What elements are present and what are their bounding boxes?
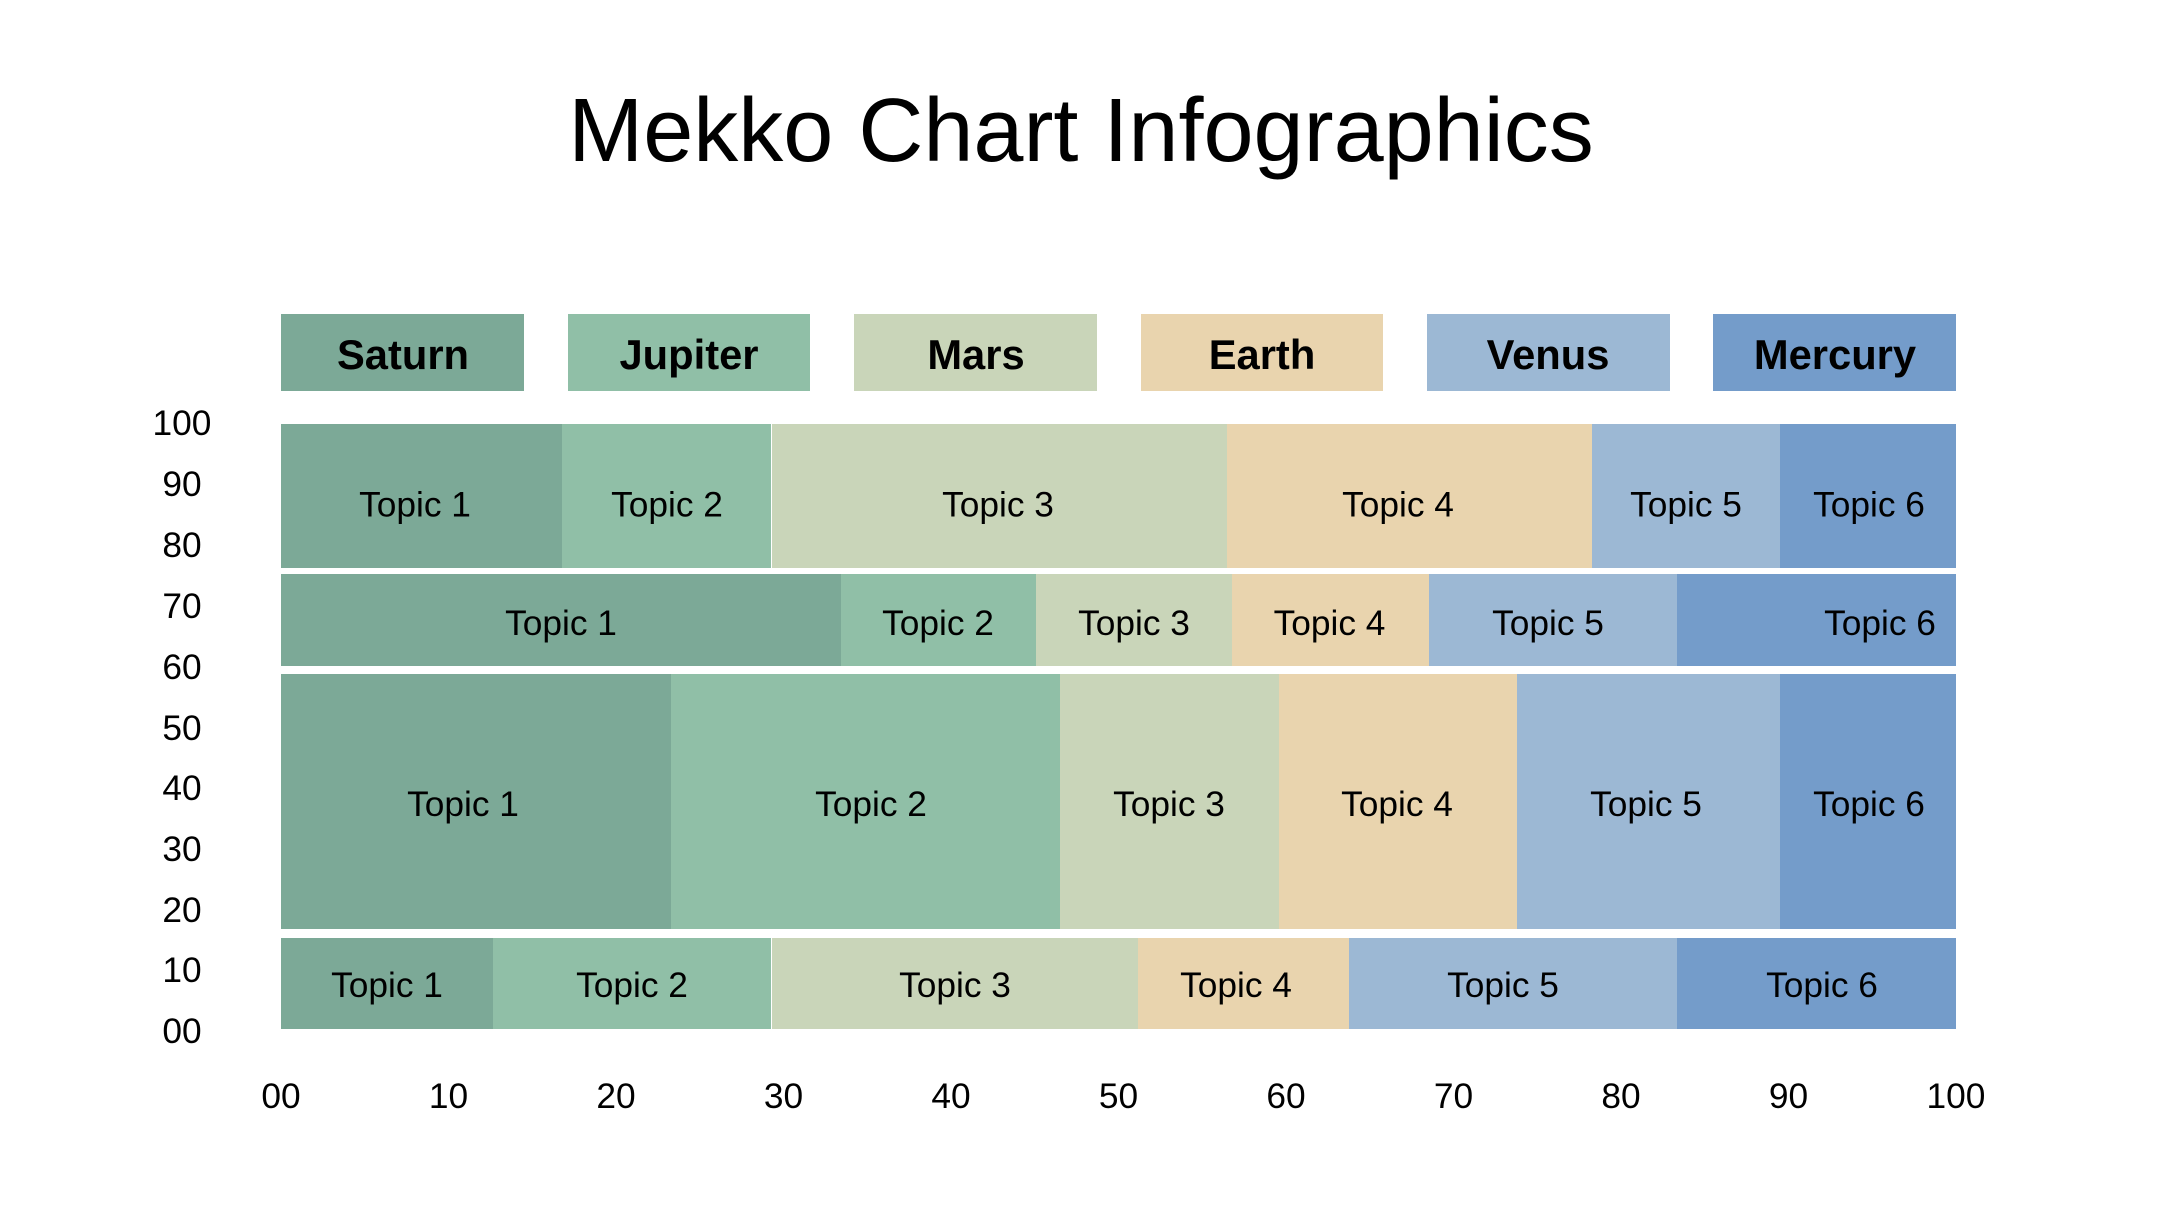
- y axis labels: 80: [162, 526, 202, 565]
- row 2 topic 6: Topic 6: [1824, 604, 1936, 643]
- row 1 topic 3: [772, 424, 1227, 568]
- y axis labels: 30: [162, 830, 202, 869]
- x axis labels: 20: [596, 1077, 636, 1116]
- row 4 topic 2: Topic 2: [576, 966, 688, 1005]
- row 2 topic 5: [1429, 574, 1677, 666]
- y axis labels: 40: [162, 769, 202, 808]
- row 3 topic 3: Topic 3: [1113, 785, 1225, 824]
- y axis labels: [153, 404, 211, 1051]
- legend: Mercury: Mercury: [1754, 331, 1916, 378]
- row 3 topic 2: Topic 2: [815, 785, 927, 824]
- chart row 3: [281, 674, 1956, 929]
- row 1 topic 2: Topic 2: [611, 486, 723, 524]
- row 1 topic 5: Topic 5: [1630, 486, 1742, 524]
- row 1 topic 4: Topic 4: [1342, 486, 1454, 524]
- legend: Mercury: [1713, 314, 1956, 391]
- row 4 topic 1: [281, 938, 493, 1029]
- row 3 topic 1: Topic 1: [407, 785, 519, 824]
- y axis labels: 70: [162, 587, 202, 626]
- row 3 topic 5: [1517, 674, 1780, 929]
- legend: Mars: Mars: [927, 331, 1025, 378]
- legend: Venus: Venus: [1487, 331, 1609, 378]
- y axis labels: 50: [162, 709, 202, 748]
- row 4 topic 3: Topic 3: [899, 966, 1011, 1005]
- row 1 topic 4: [1227, 424, 1592, 568]
- row 1 topic 6: Topic 6: [1813, 486, 1925, 524]
- row 2 topic 5: Topic 5: [1492, 604, 1604, 643]
- row 2 topic 1: [281, 574, 841, 666]
- row 4 topic 6: Topic 6: [1766, 966, 1878, 1005]
- x axis labels: 70: [1434, 1077, 1473, 1116]
- row 1 topic 3: Topic 3: [942, 486, 1054, 524]
- row 4 topic 2: [493, 938, 771, 1029]
- legend: Jupiter: Jupiter: [620, 331, 758, 378]
- x axis labels: 60: [1266, 1077, 1306, 1116]
- x axis labels: [261, 1077, 1985, 1116]
- title: Mekko Chart Infographics: [568, 81, 1594, 181]
- row 1 topic 1: Topic 1: [359, 486, 471, 524]
- legend: Earth: Earth: [1209, 331, 1315, 378]
- x axis labels: 30: [764, 1077, 803, 1116]
- row 4 topic 4: Topic 4: [1180, 966, 1292, 1005]
- y axis labels: 10: [162, 951, 202, 990]
- row 3 topic 3: [1060, 674, 1279, 929]
- row 4 topic 1: Topic 1: [331, 966, 443, 1005]
- row 2 topic 3: Topic 3: [1078, 604, 1190, 643]
- legend: Saturn: Saturn: [337, 331, 469, 378]
- row 4 topic 3: [772, 938, 1138, 1029]
- row 3 topic 6: Topic 6: [1813, 785, 1925, 824]
- row 1 topic 1: [281, 424, 562, 568]
- y axis labels: 100: [153, 404, 211, 443]
- row 1 topic 2: [562, 424, 771, 568]
- x axis labels: 100: [1927, 1077, 1985, 1116]
- row 3 topic 2: [671, 674, 1060, 929]
- row 4 topic 4: [1138, 938, 1349, 1029]
- chart row 2: [281, 574, 1956, 666]
- row 2 topic 6: [1677, 574, 1956, 666]
- x axis labels: 90: [1769, 1077, 1808, 1116]
- legend: Saturn: [281, 314, 524, 391]
- x axis labels: 50: [1099, 1077, 1138, 1116]
- chart row 1: [281, 424, 1956, 568]
- row 2 topic 3: [1036, 574, 1232, 666]
- mekko chart: [281, 424, 1956, 1029]
- row 3 topic 4: [1279, 674, 1517, 929]
- row 4 topic 5: Topic 5: [1447, 966, 1559, 1005]
- row 2 topic 2: Topic 2: [882, 604, 994, 643]
- row 3 topic 1: [281, 674, 671, 929]
- y axis labels: 20: [162, 891, 202, 930]
- row 3 topic 4: Topic 4: [1341, 785, 1453, 824]
- row 3 topic 6: [1780, 674, 1956, 929]
- x axis labels: 80: [1601, 1077, 1641, 1116]
- y axis labels: 90: [162, 465, 202, 504]
- x axis labels: 10: [429, 1077, 468, 1116]
- x axis labels: 00: [261, 1077, 301, 1116]
- row 2 topic 4: Topic 4: [1274, 604, 1385, 643]
- legend: Earth: [1141, 314, 1383, 391]
- y axis labels: 60: [162, 648, 202, 687]
- legend: Venus: [1427, 314, 1670, 391]
- row 4 topic 5: [1349, 938, 1677, 1029]
- row 3 topic 5: Topic 5: [1590, 785, 1702, 824]
- row 2 topic 4: [1232, 574, 1429, 666]
- x axis labels: 40: [931, 1077, 971, 1116]
- legend: Jupiter: [568, 314, 810, 391]
- row 1 topic 5: [1592, 424, 1780, 568]
- row 1 topic 6: [1780, 424, 1956, 568]
- row 2 topic 1: Topic 1: [505, 604, 617, 643]
- chart row 4: [281, 938, 1956, 1029]
- legend: Mars: [854, 314, 1097, 391]
- y axis labels: 00: [162, 1012, 202, 1051]
- row 2 topic 2: [841, 574, 1036, 666]
- row 4 topic 6: [1677, 938, 1956, 1029]
- legend headers: [281, 314, 1956, 391]
